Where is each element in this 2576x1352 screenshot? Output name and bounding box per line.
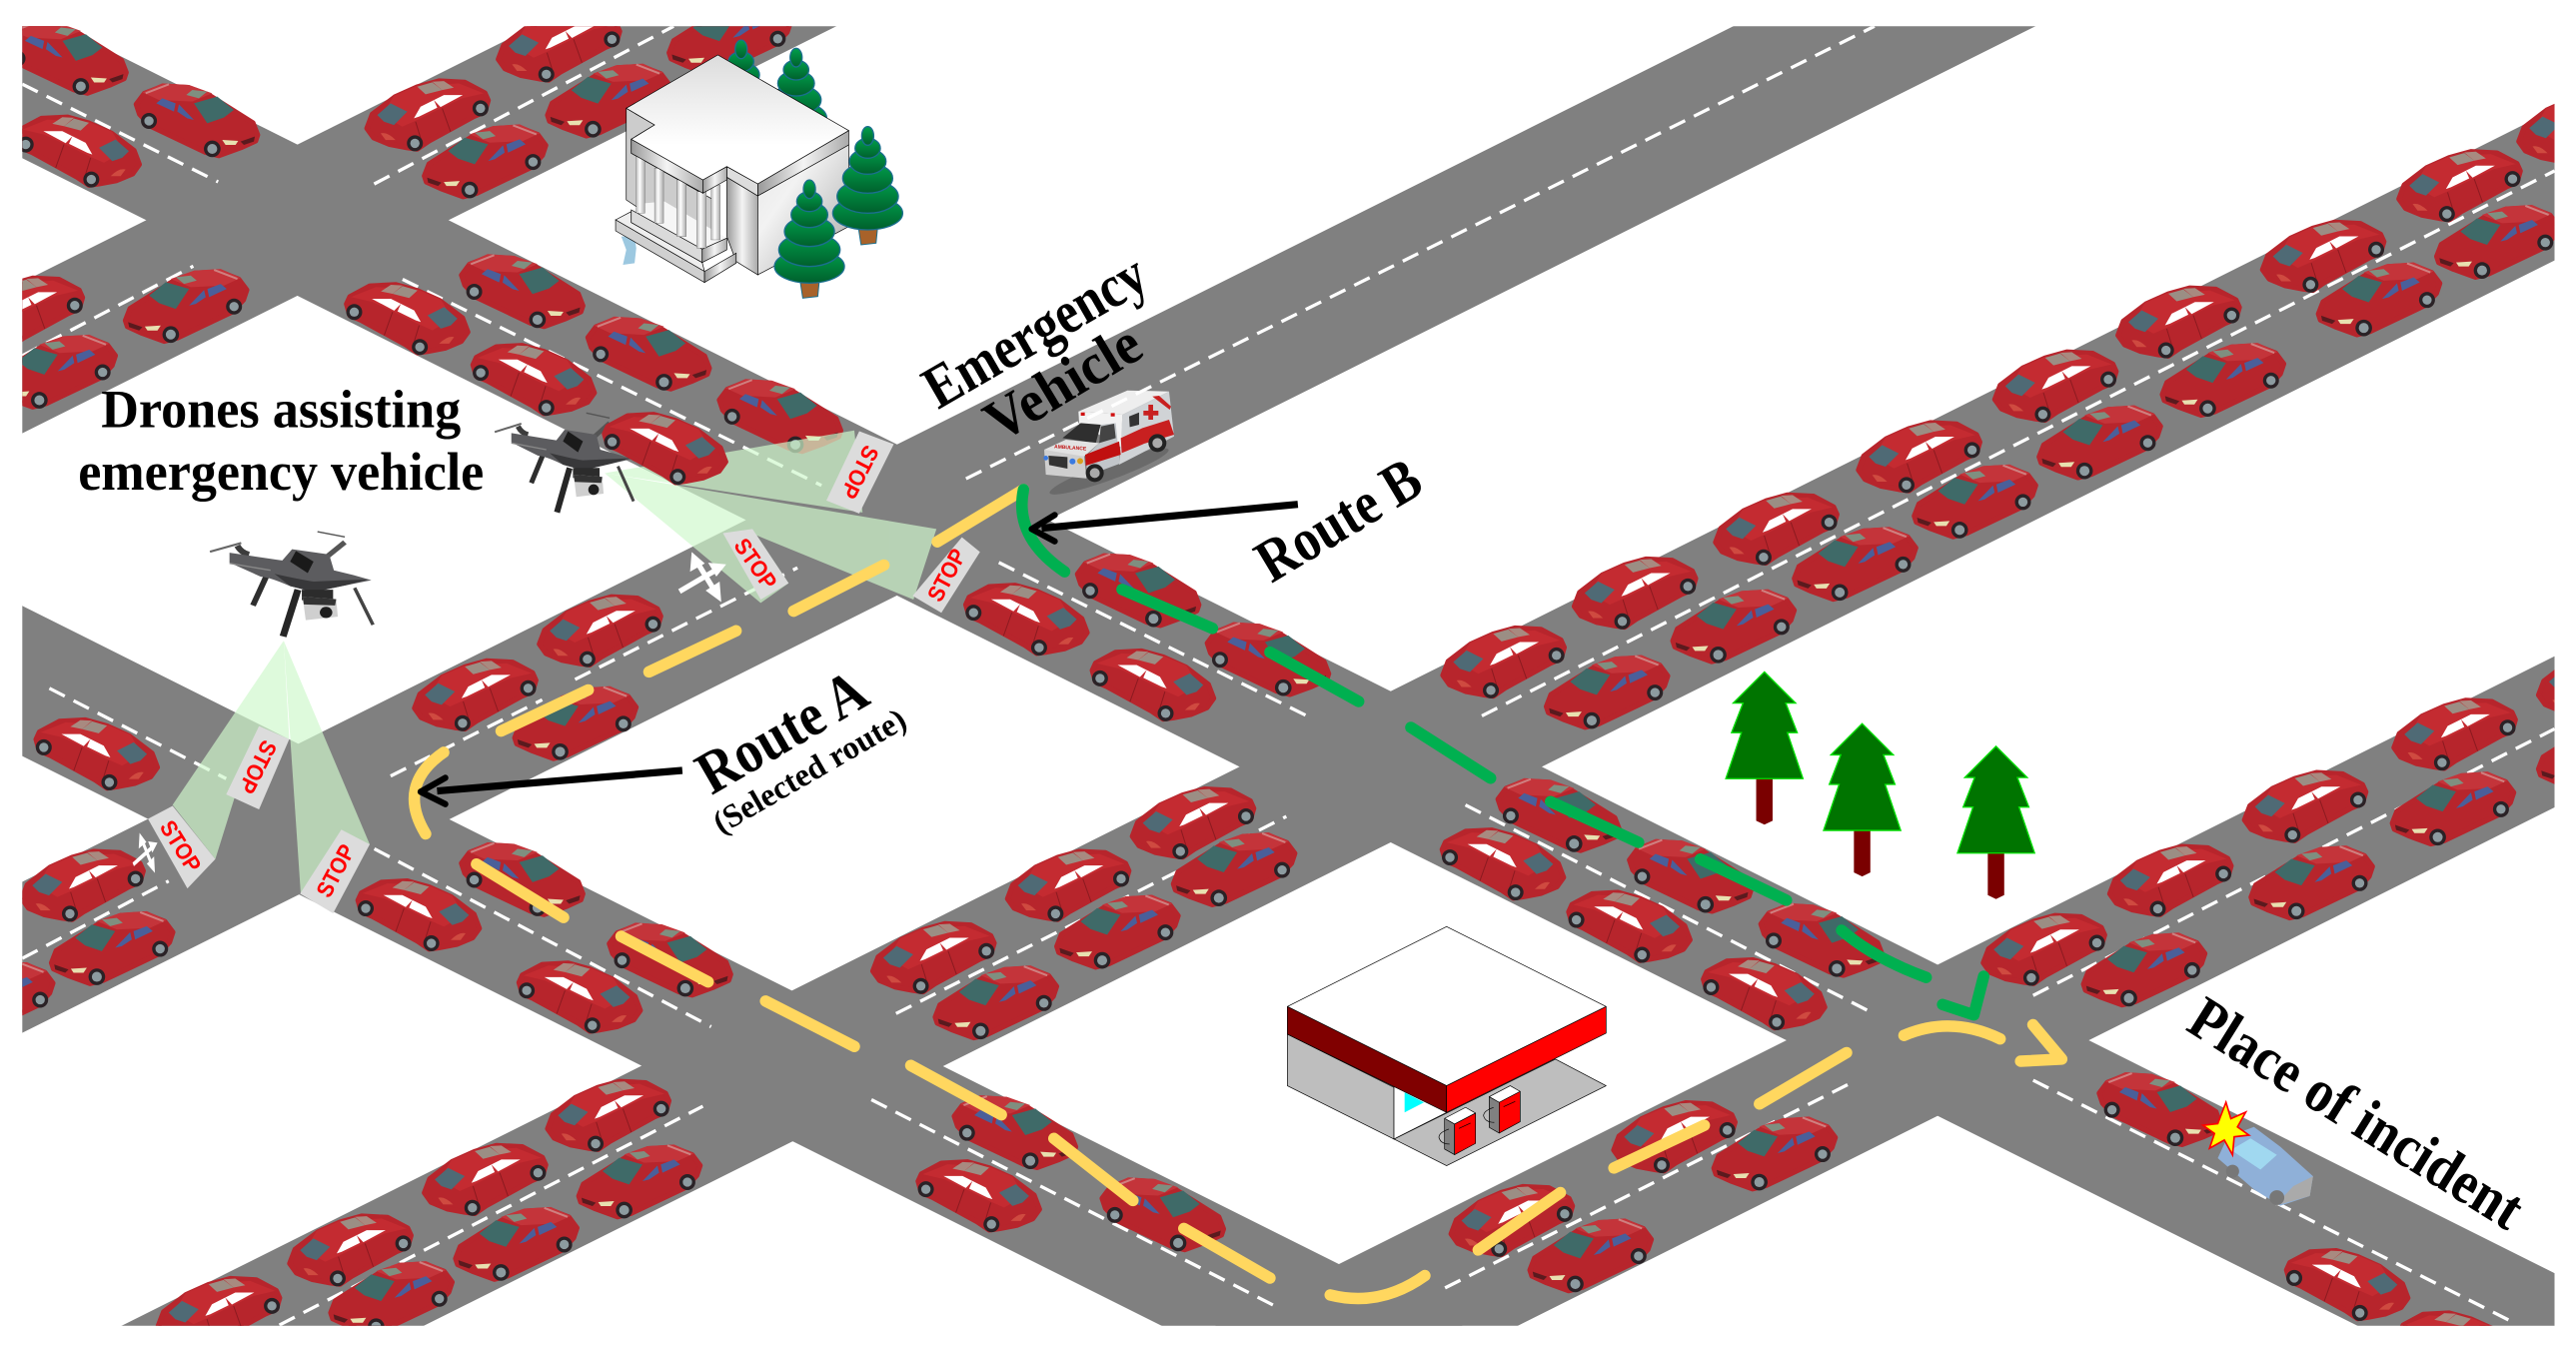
cars: north road — [0, 1, 790, 409]
cars: lower-left road — [158, 1081, 700, 1349]
stop sign 6 — [300, 829, 370, 913]
car over upper drone — [605, 415, 725, 485]
trees behind building — [706, 40, 831, 167]
label: Emergency: Emergency — [911, 241, 1158, 422]
drone: upper — [495, 413, 634, 513]
cars: beyond incident — [2096, 1072, 2492, 1326]
trees in front of building — [774, 127, 902, 298]
icon: movement arrows upper — [679, 552, 726, 603]
label: Vehicle: Vehicle — [972, 310, 1153, 455]
stop sign 6: STOP — [311, 840, 360, 901]
heading: drones assisting: Drones assisting — [101, 379, 461, 439]
heading: emergency vehicle: emergency vehicle — [78, 442, 484, 502]
cars: bottom-right road — [1451, 648, 2576, 1292]
arrow: route B pointer — [1032, 505, 1298, 542]
label: Route A: Route A — [685, 657, 879, 807]
cars: main road left — [0, 597, 660, 1036]
icon: movement arrows lower — [133, 833, 158, 873]
drone light beams: lower drone — [173, 641, 370, 893]
cars: long avenue lower lane — [1547, 205, 2558, 728]
cars: upper avenue middle — [965, 554, 1329, 721]
cars: middle block — [873, 789, 1295, 1039]
label: place of incident: Place of incident — [2177, 984, 2536, 1243]
arrow: route A pointer — [421, 770, 682, 804]
drone light beams: upper drone — [605, 431, 936, 603]
cars: long avenue upper lane — [1443, 94, 2576, 698]
route B (green) — [1022, 490, 1983, 1015]
stop sign 3 — [912, 538, 980, 613]
cars: top-left approach — [5, 21, 258, 188]
ambulance — [1043, 391, 1174, 501]
label: Route B: Route B — [1244, 446, 1434, 596]
stop sign 3: STOP — [922, 545, 971, 606]
crash: blue car — [2217, 1127, 2313, 1206]
building — [616, 55, 848, 283]
drone: lower — [210, 532, 373, 637]
stop sign 2: STOP — [728, 534, 782, 594]
route A (selected, yellow) — [415, 490, 2061, 1299]
crash: explosion star — [2203, 1102, 2249, 1155]
cars: lower avenue right — [918, 1095, 1223, 1251]
stop signs — [148, 432, 980, 913]
green trees — [1726, 672, 2034, 899]
stop sign 1: STOP — [835, 442, 884, 503]
cars: avenue to incident — [1442, 778, 1883, 1030]
cars: lower avenue left — [36, 720, 730, 1033]
stop sign 1 — [826, 432, 893, 514]
stop sign 5 — [148, 806, 215, 888]
cars: upper avenue left — [347, 254, 840, 453]
ambulance: AMBULANCE — [1054, 444, 1087, 453]
gas station — [1287, 926, 1606, 1166]
stop sign 4: STOP — [234, 736, 282, 797]
stop sign 4 — [226, 726, 289, 809]
stop sign 5: STOP — [155, 815, 207, 876]
label: selected route: (Selected route) — [707, 701, 912, 841]
